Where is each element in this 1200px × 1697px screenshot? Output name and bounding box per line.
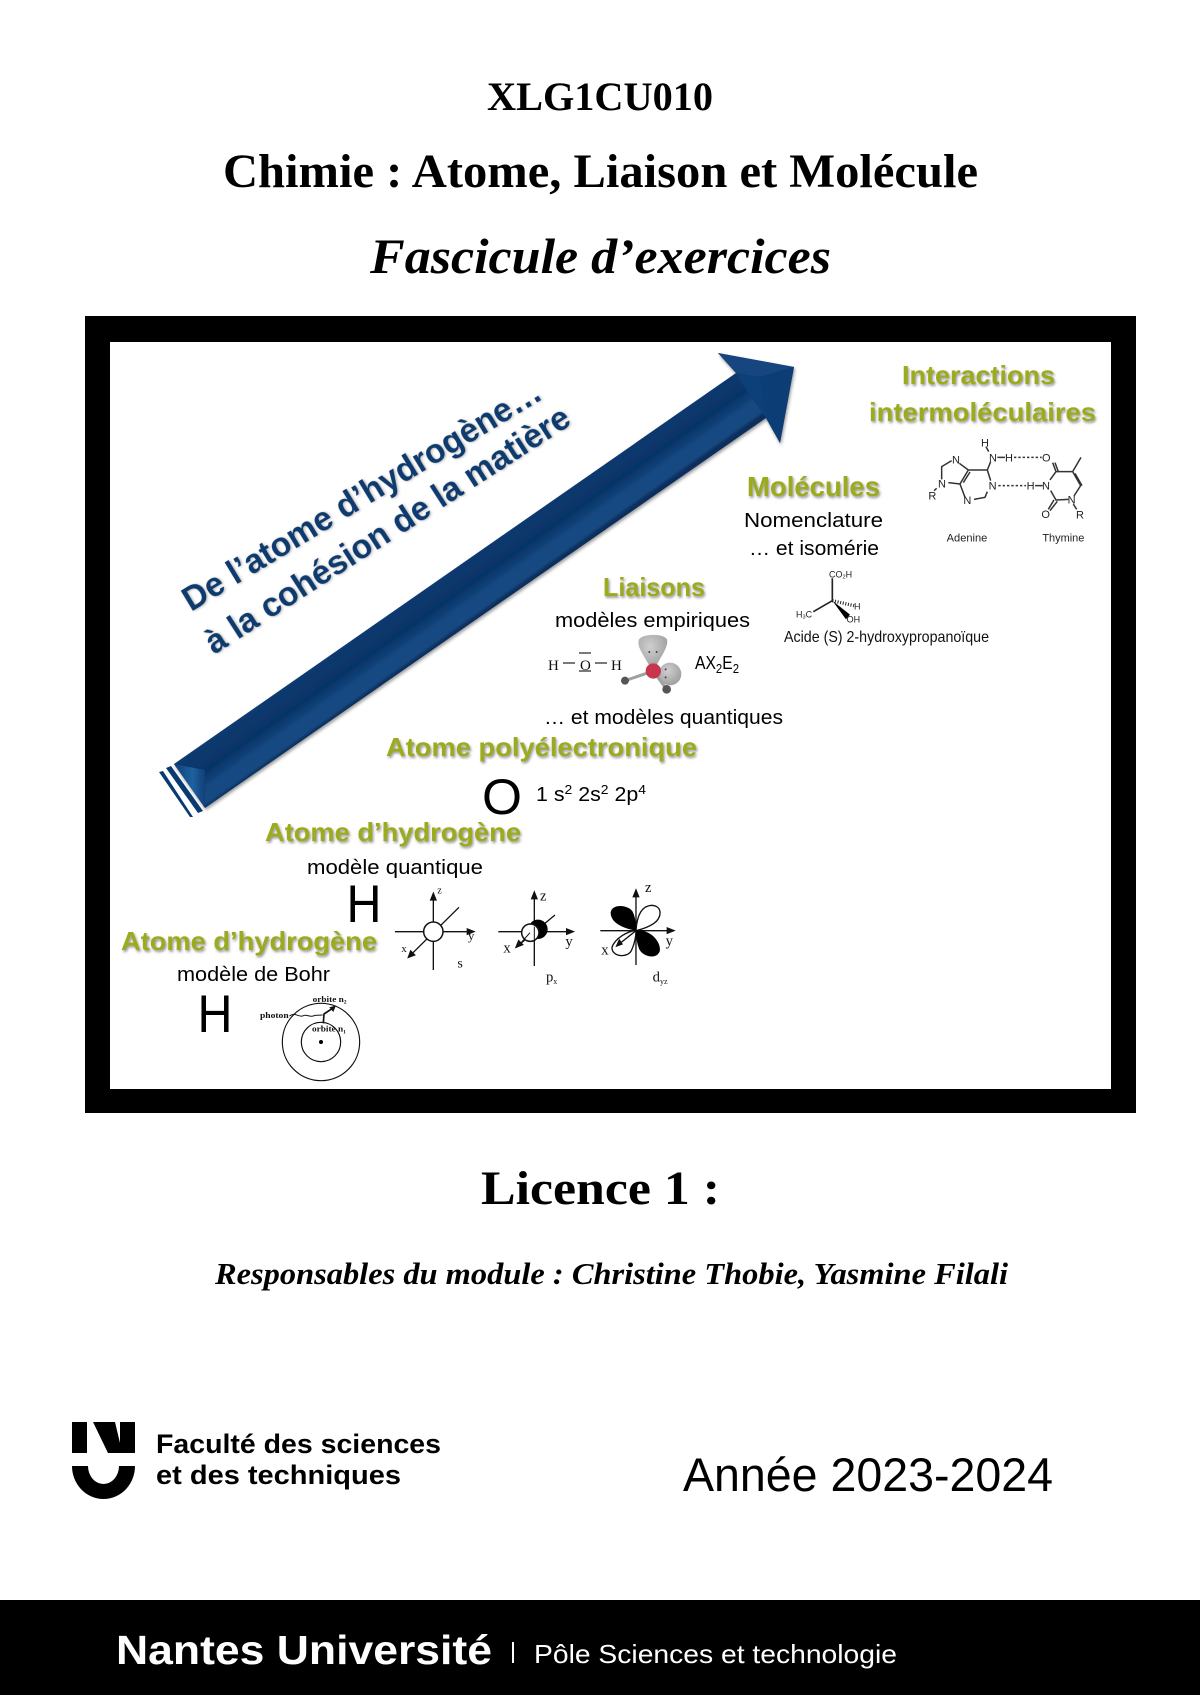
- icon: Bohr atom diagram: 2: [344, 1000, 347, 1006]
- formula: VSEPR type: E: [722, 653, 733, 673]
- section: molécules: … et isomérie: [749, 538, 879, 560]
- section: atome d'hydrogène, modèle quantique: H: [346, 875, 382, 934]
- icon: p orbital: x: [553, 977, 557, 986]
- section: atome polyélectronique: 2: [565, 782, 572, 797]
- icon: adenine-thymine pair: N: [989, 452, 997, 464]
- section: atome d'hydrogène, modèle de Bohr: [121, 926, 377, 1044]
- icon: d orbital: [600, 880, 674, 986]
- section: atome polyélectronique: [386, 732, 697, 825]
- footer band: Pôle Sciences et technologie: [534, 1639, 897, 1669]
- icon: d orbital: yz: [660, 977, 668, 986]
- icon: p orbital: x: [503, 941, 511, 957]
- section: atome polyélectronique: 2p: [609, 784, 638, 806]
- icon: adenine-thymine pair: N: [1068, 494, 1076, 506]
- panel: framed illustration: [85, 316, 1136, 1113]
- section: interactions intermoléculaires: intermoléculaires: [869, 397, 1096, 427]
- text: module leads: Responsables du module : Christine Thobie, Yasmine Filali: [214, 1256, 1008, 1291]
- icon: adenine-thymine pair: O: [1042, 452, 1051, 464]
- icon: Bohr atom diagram: 1: [343, 1029, 346, 1035]
- icon: s orbital: x: [401, 944, 407, 955]
- icon: d orbital: z: [645, 880, 652, 896]
- section: molécules: [744, 471, 883, 560]
- section: interactions intermoléculaires: [869, 360, 1096, 427]
- section: atome polyélectronique: 2s: [572, 784, 601, 806]
- icon: p orbital: y: [565, 934, 573, 950]
- formula: VSEPR type: 2: [716, 661, 722, 676]
- icon: d orbital: y: [666, 933, 674, 949]
- icon: Bohr atom diagram: orbite n: [312, 1024, 341, 1034]
- logo: faculté: Faculté des sciences: [156, 1429, 441, 1459]
- icon: s orbital: z: [437, 885, 442, 896]
- icon: adenine-thymine pair: H: [981, 438, 989, 450]
- icon: water molecule: [621, 635, 681, 694]
- icon: s orbital: s: [457, 956, 463, 971]
- icon: lactic acid: H: [846, 569, 852, 579]
- icon: lactic acid: CO: [829, 569, 842, 579]
- logo: faculté: [72, 1422, 441, 1499]
- icon: adenine-thymine pair: Thymine: [1042, 532, 1084, 544]
- text: academic year: Année 2023-2024: [683, 1448, 1053, 1501]
- icon: p orbital: z: [540, 889, 547, 905]
- formula: Lewis water: H: [611, 658, 622, 674]
- section: atome d'hydrogène, modèle quantique: [265, 817, 521, 934]
- icon: adenine-thymine pair: H: [1005, 452, 1013, 464]
- icon: lactic acid: [796, 569, 860, 624]
- section: atome d'hydrogène, modèle quantique: modèle quantique: [307, 857, 483, 879]
- icon: lactic acid: 3: [802, 615, 806, 621]
- section: atome d'hydrogène, modèle de Bohr: Atome d’hydrogène: [121, 926, 377, 956]
- icon: adenine-thymine pair: N: [952, 454, 960, 466]
- section: molécules: Molécules: [747, 471, 880, 502]
- footer band: Nantes Université: [116, 1627, 492, 1673]
- icon: p orbital: p: [546, 969, 553, 985]
- formula: VSEPR type: AX: [695, 653, 719, 673]
- icon: adenine-thymine pair: R: [1076, 510, 1084, 522]
- formula: Lewis water: H: [548, 658, 559, 674]
- icon: adenine-thymine pair: N: [938, 478, 946, 490]
- icon: adenine-thymine pair: H: [1027, 481, 1035, 493]
- section: atome polyélectronique: 4: [638, 782, 646, 797]
- course code: XLG1CU010: [487, 74, 713, 119]
- section: liaisons: Liaisons: [603, 572, 705, 602]
- arrow caption: à la cohésion de la matière: [198, 398, 577, 662]
- icon: adenine-thymine pair: Adenine: [947, 532, 987, 544]
- icon: s orbital: [395, 885, 475, 971]
- section: interactions intermoléculaires: Interactions: [902, 360, 1055, 390]
- chart: atomic orbitals: [395, 880, 674, 986]
- section: atome polyélectronique: O: [482, 769, 522, 825]
- section: atome d'hydrogène, modèle de Bohr: H: [198, 985, 232, 1044]
- section: atome polyélectronique: 1 s: [536, 784, 563, 806]
- icon: lactic acid: 2: [842, 575, 846, 581]
- section: liaisons: modèles empiriques: [555, 610, 750, 632]
- icon: adenine-thymine pair: N: [989, 481, 997, 493]
- section: atome d'hydrogène, modèle quantique: Atome d’hydrogène: [265, 817, 521, 847]
- heading: licence: Licence 1 :: [481, 1162, 720, 1215]
- icon: adenine-thymine pair: O: [1041, 509, 1050, 521]
- icon: adenine-thymine pair: R: [928, 490, 936, 502]
- icon: adenine-thymine pair: N: [1042, 481, 1050, 493]
- section: molécules: Nomenclature: [744, 510, 883, 532]
- icon: d orbital: x: [601, 943, 609, 959]
- footer band: [0, 1600, 1200, 1695]
- icon: Bohr atom diagram: orbite n: [313, 994, 342, 1004]
- title: Chimie : Atome, Liaison et Molécule: [223, 145, 978, 198]
- icon: lactic acid: OH: [847, 614, 860, 624]
- formula: Lewis water: O: [580, 658, 591, 674]
- section: atome polyélectronique: 2: [601, 782, 609, 797]
- icon: p orbital: [498, 889, 573, 986]
- icon: Bohr atom diagram: photon: [260, 1010, 289, 1020]
- icon: adenine-thymine pair: [928, 438, 1084, 544]
- arrow caption: De l’atome d’hydrogène…: [175, 372, 548, 619]
- icon: lactic acid: C: [806, 609, 813, 619]
- icon: Bohr atom diagram: [260, 994, 360, 1081]
- label: lactic acid name: Acide (S) 2-hydroxypropanoïque: [784, 629, 989, 646]
- formula: Lewis water: [548, 653, 622, 674]
- icon: lactic acid: H: [796, 609, 802, 619]
- logo: faculté: et des techniques: [156, 1460, 401, 1490]
- subtitle: Fascicule d’exercices: [369, 228, 831, 284]
- section: liaisons: … et modèles quantiques: [544, 707, 783, 729]
- section: atome d'hydrogène, modèle de Bohr: modèle de Bohr: [177, 964, 330, 986]
- arrow: progression: [159, 353, 794, 817]
- icon: lactic acid: H: [854, 602, 860, 612]
- section: liaisons: [544, 572, 783, 729]
- icon: adenine-thymine pair: N: [963, 495, 971, 507]
- formula: VSEPR type: 2: [733, 661, 739, 676]
- icon: s orbital: y: [468, 929, 475, 943]
- icon: d orbital: d: [653, 969, 660, 985]
- section: atome polyélectronique: Atome polyélectronique: [386, 732, 697, 762]
